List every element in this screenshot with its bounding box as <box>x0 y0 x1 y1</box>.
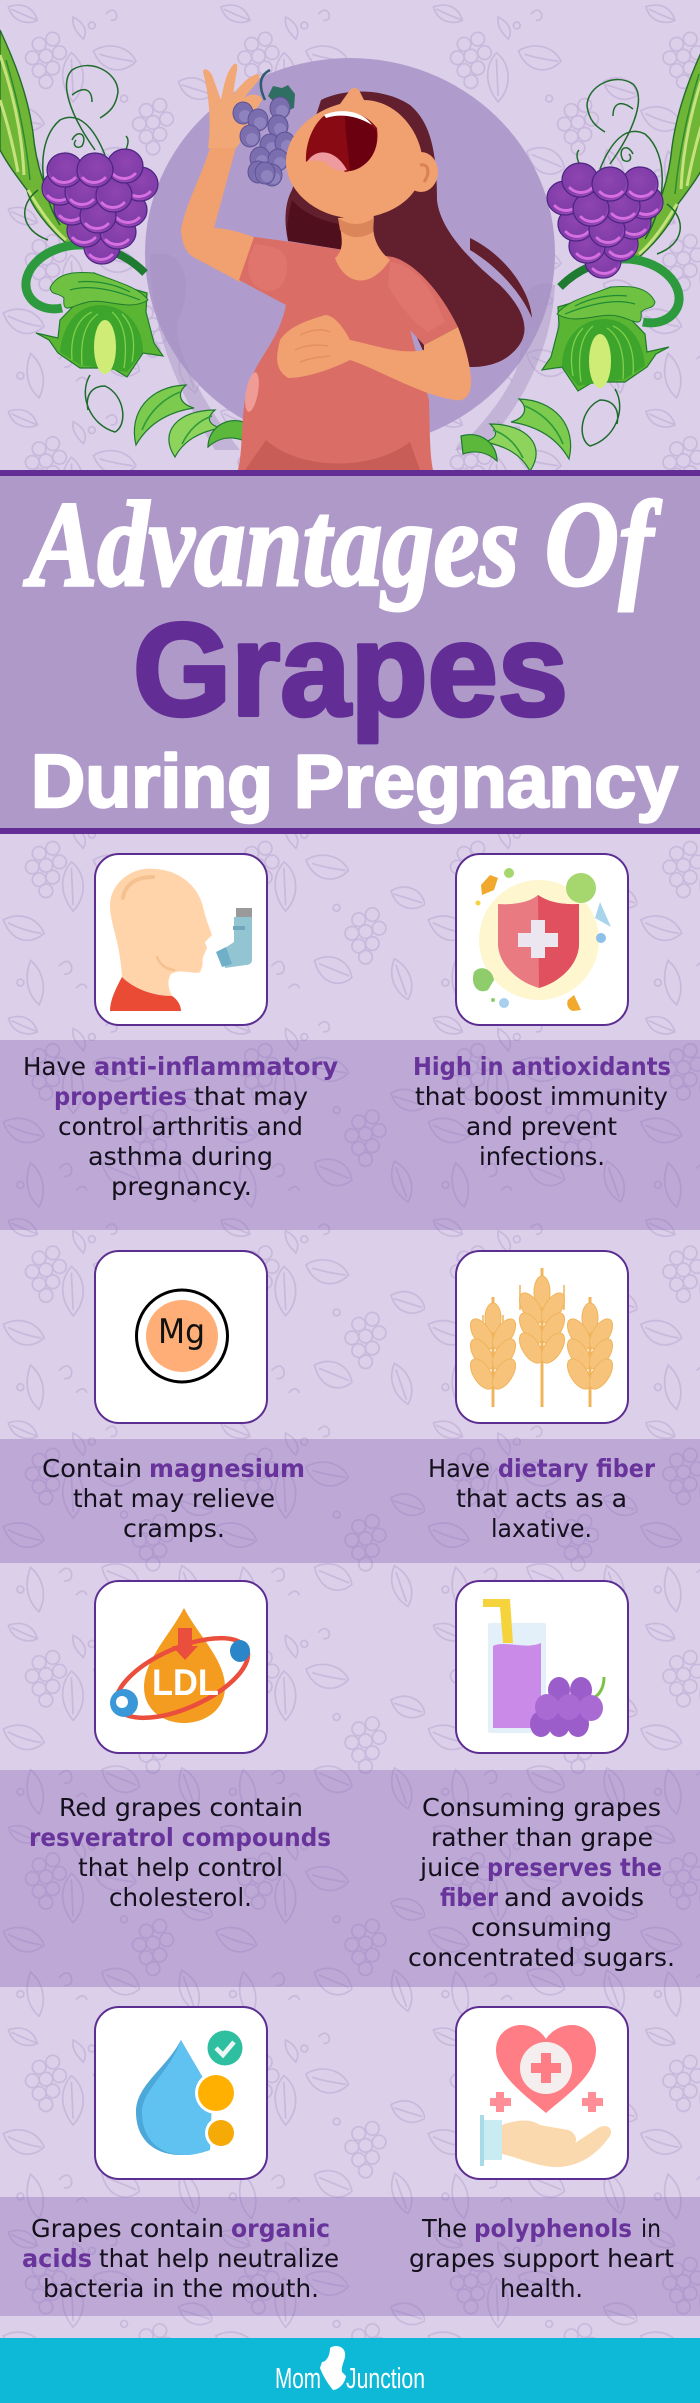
body text 2 right: that acts as a <box>456 1484 627 1513</box>
card: immunity shield icon <box>456 854 628 1025</box>
left vine with grapes and leaves <box>0 30 244 457</box>
orbit ring <box>105 1622 259 1734</box>
body text 1 left: asthma during <box>88 1142 273 1171</box>
hand <box>203 64 262 148</box>
ear <box>414 152 438 192</box>
body text 1 right: High in antioxidants <box>413 1052 671 1081</box>
body text 1 left <box>23 1052 338 1201</box>
inhaler <box>236 908 252 918</box>
card: water drop and acids icon <box>95 2007 267 2179</box>
card: juice and grapes icon <box>456 1581 628 1753</box>
body text 2 right: laxative. <box>491 1514 592 1543</box>
card: asthma inhaler icon <box>95 854 267 1025</box>
body text 2 left <box>42 1454 305 1543</box>
body text 2 left: cramps. <box>123 1514 225 1543</box>
dress <box>238 237 458 470</box>
shield <box>498 895 579 988</box>
center wheat stalk <box>515 1268 569 1407</box>
body text 3 left <box>29 1793 331 1912</box>
small grape bunch <box>233 70 295 186</box>
text band backgrounds <box>0 1040 700 2316</box>
body text 1 left: properties <box>54 1082 187 1111</box>
header illustration: pregnant woman eating grapes <box>0 30 700 471</box>
title band <box>0 470 700 834</box>
body text 4 right: The <box>421 2214 467 2243</box>
LDL label: LDL <box>152 1662 219 1703</box>
body text 2 left: magnesium <box>149 1454 305 1483</box>
body text 4 left: organic <box>231 2214 330 2243</box>
body text 1 left: anti-inflammatory <box>94 1052 338 1081</box>
body text 4 right: health. <box>500 2274 583 2303</box>
body text 3 right: Consuming grapes <box>422 1793 661 1822</box>
cuff <box>480 2115 484 2166</box>
body text 4 left: that help neutralize <box>99 2244 339 2273</box>
red shirt <box>110 977 181 1011</box>
body text 3 right: concentrated sugars. <box>408 1943 675 1972</box>
body text 2 right <box>428 1454 656 1543</box>
card: magnesium icon: Mg <box>158 1312 205 1352</box>
body text 4 right <box>409 2214 674 2303</box>
body text 3 left: Red grapes contain <box>59 1793 303 1822</box>
card: wheat fiber icon <box>456 1251 628 1423</box>
body text 4 right: polyphenols <box>474 2214 632 2243</box>
neck <box>335 215 390 280</box>
body text 1 right <box>413 1052 671 1171</box>
body text 3 left: cholesterol. <box>109 1883 252 1912</box>
card: heart health icon <box>456 2007 628 2179</box>
orbit balls <box>230 1640 250 1662</box>
right wheat stalk <box>563 1297 617 1407</box>
raised arm <box>181 147 256 282</box>
body text 1 right: infections. <box>479 1142 605 1171</box>
faint leaf ghosts in oval <box>157 284 555 450</box>
left wheat stalk <box>466 1297 520 1407</box>
belly <box>245 440 420 470</box>
body text 3 left: resveratrol compounds <box>29 1823 331 1852</box>
down arrow <box>172 1628 198 1660</box>
body text 2 left: that may relieve <box>73 1484 275 1513</box>
face <box>286 88 423 218</box>
body text 3 right: rather than grape <box>431 1823 653 1852</box>
mouth <box>306 112 378 172</box>
purple oval backdrop <box>145 58 555 448</box>
body text 1 left: Have <box>23 1052 86 1081</box>
body text 2 right: dietary fiber <box>498 1454 656 1483</box>
title: Grapes: Grapes <box>133 596 568 743</box>
drop <box>144 1608 225 1723</box>
resting arm and hand <box>277 315 471 400</box>
right vine with grapes and leaves <box>461 44 700 471</box>
title: During Pregnancy: During Pregnancy <box>31 739 678 823</box>
card: LDL cholesterol icon <box>95 1581 267 1753</box>
body text 4 right: in <box>641 2214 661 2243</box>
body text 3 right: consuming <box>471 1913 612 1942</box>
body text 3 right: preserves the <box>487 1853 662 1882</box>
hair <box>285 92 524 367</box>
hand <box>502 2120 611 2167</box>
body text 3 right: juice <box>419 1853 480 1882</box>
body text 1 right: that boost immunity <box>415 1082 668 1111</box>
body text 3 right <box>408 1793 675 1972</box>
woman <box>181 64 532 470</box>
body text 2 right: Have <box>428 1454 490 1483</box>
body text 1 left: pregnancy. <box>111 1172 252 1201</box>
body text 3 left: that help control <box>78 1853 283 1882</box>
body text 4 left: acids <box>22 2244 92 2273</box>
body text 4 right: grapes support heart <box>409 2244 674 2273</box>
body text 4 left: bacteria in the mouth. <box>43 2274 319 2303</box>
footer bar with MomJunction logo: Junction <box>346 2363 425 2395</box>
footer bar with MomJunction logo <box>0 2338 700 2403</box>
body text 4 left <box>22 2214 339 2303</box>
logo figure <box>320 2346 346 2390</box>
body text 3 right: and avoids <box>504 1883 644 1912</box>
body text 4 left: Grapes contain <box>31 2214 224 2243</box>
body text 3 right: fiber <box>440 1883 499 1912</box>
body text 1 right: and prevent <box>466 1112 617 1141</box>
body text 1 left: control arthritis and <box>58 1112 303 1141</box>
card: magnesium icon <box>95 1251 267 1423</box>
body text 2 left: Contain <box>42 1454 142 1483</box>
body text 1 left: that may <box>194 1082 308 1111</box>
head profile <box>110 869 212 996</box>
logo wordmark: Mom <box>275 2363 321 2395</box>
